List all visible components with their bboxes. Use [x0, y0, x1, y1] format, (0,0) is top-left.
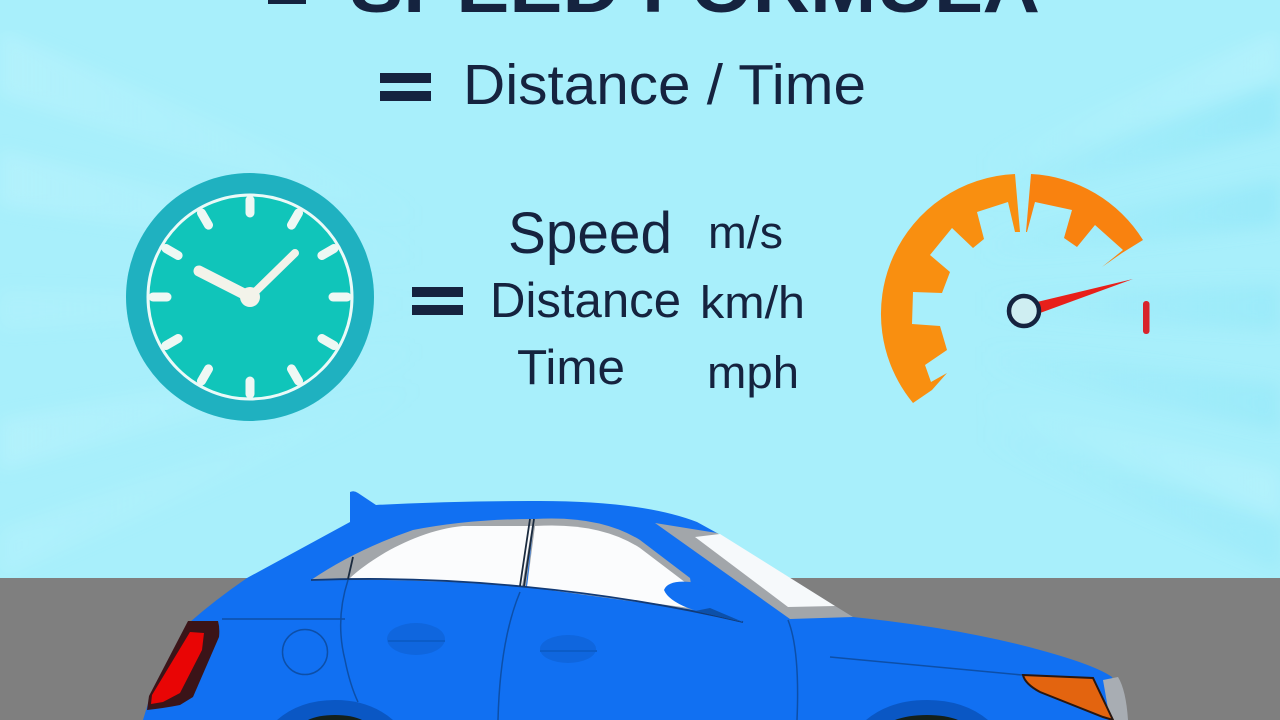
gauge hub [1009, 296, 1039, 326]
door seams [222, 580, 1022, 720]
door handles [387, 623, 597, 663]
mirror shadow [695, 608, 743, 622]
windshield [655, 523, 853, 619]
gauge needle [1037, 279, 1133, 313]
unit labels [700, 207, 805, 398]
quantity labels: Distance [490, 274, 681, 328]
formula equals sign [380, 73, 431, 101]
unit labels: mph [707, 347, 799, 398]
icon: speedometer [881, 174, 1150, 403]
clock hands [199, 253, 295, 307]
headlight [1023, 675, 1128, 720]
gauge left arc [881, 174, 1020, 403]
road [0, 578, 1280, 720]
fuel cap [282, 630, 328, 674]
icon: clock [126, 173, 374, 421]
front wheel [866, 700, 988, 720]
second equals sign [412, 287, 463, 315]
quantity labels: Time [517, 341, 625, 395]
window sill and pillar lines [311, 519, 743, 622]
formula text: Distance / Time [463, 53, 866, 117]
unit labels: km/h [700, 277, 805, 328]
red limit tick [1143, 301, 1150, 334]
windshield glass [695, 534, 835, 607]
window glass [527, 525, 690, 608]
side mirror [664, 582, 743, 622]
formula line: equals distance over time [380, 53, 866, 117]
title equals sign [268, 0, 306, 4]
quantity labels: Speed [508, 201, 672, 266]
front side window [527, 518, 695, 610]
gauge right arc [1026, 174, 1143, 267]
window trim [311, 519, 534, 587]
window glass [350, 526, 532, 586]
rear side window [311, 519, 534, 587]
front bumper [1103, 677, 1128, 720]
car body [143, 491, 1128, 720]
rear wheel [277, 700, 393, 720]
quantity labels [490, 201, 681, 395]
window trim [527, 518, 695, 610]
unit labels: m/s [708, 207, 783, 258]
title [268, 0, 1040, 28]
car [143, 491, 1128, 720]
windshield frame [655, 523, 853, 619]
tail light [147, 621, 219, 710]
